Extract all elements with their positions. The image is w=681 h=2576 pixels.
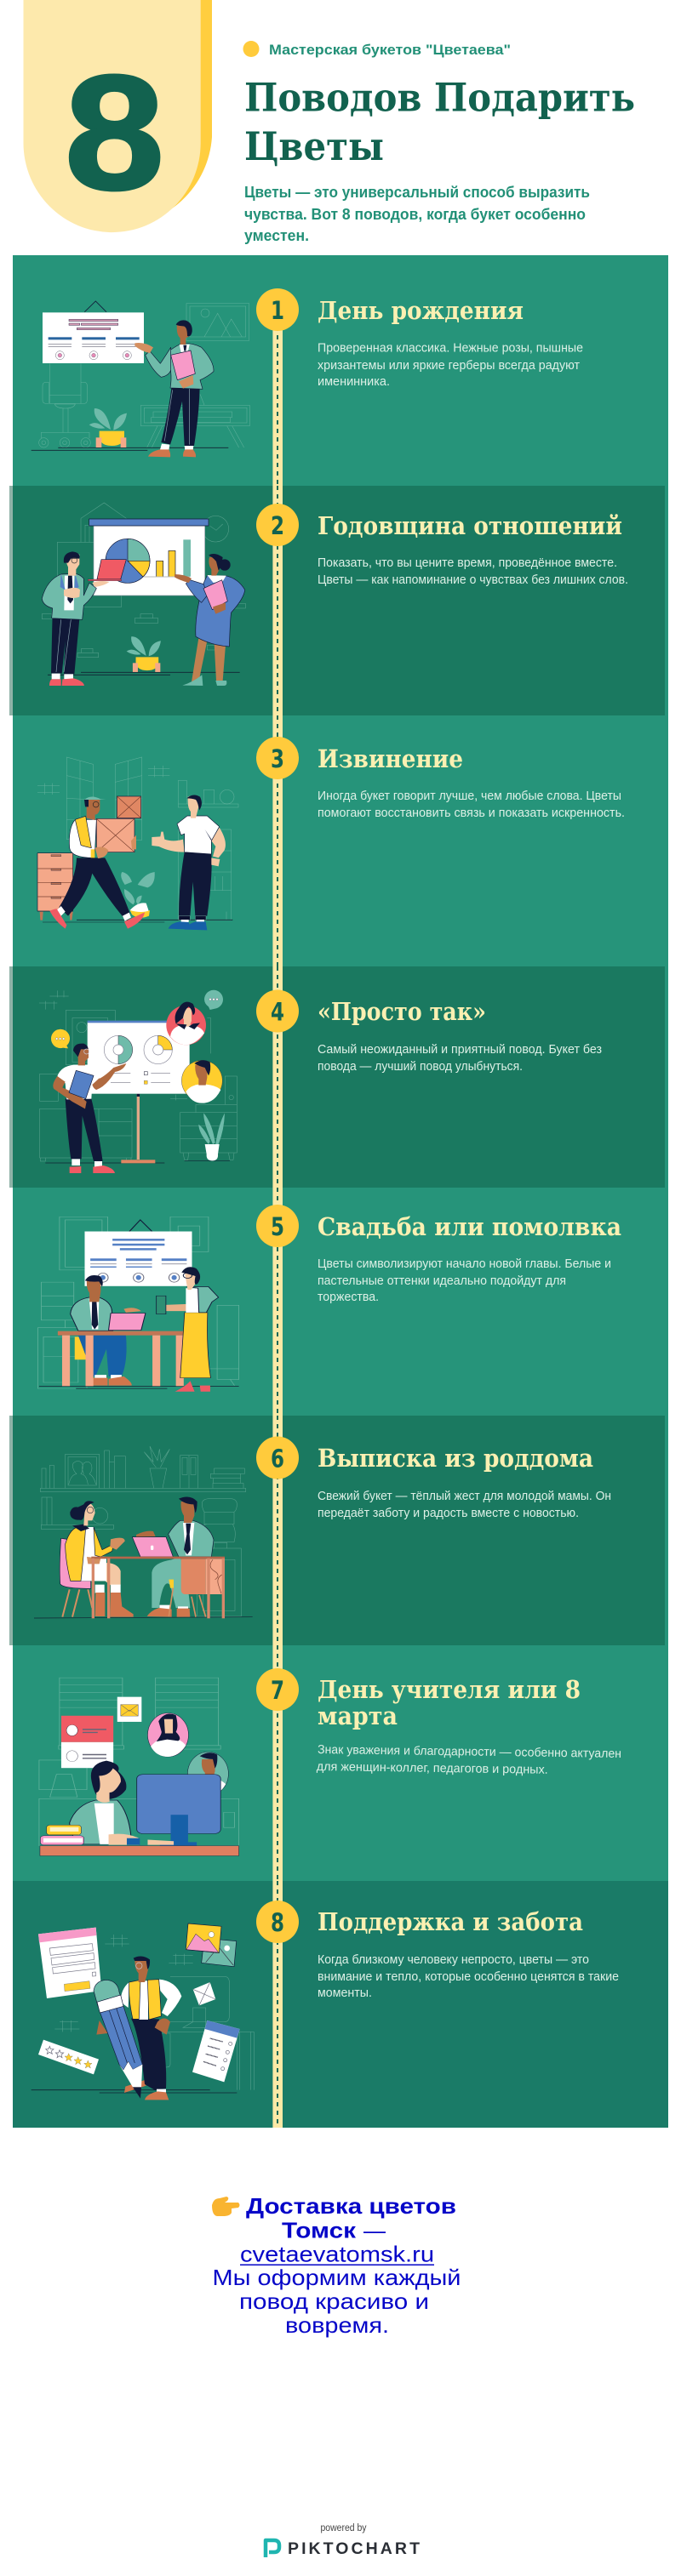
number circle 6	[256, 1436, 299, 1479]
panel: step 5	[37, 1188, 621, 1416]
website link: cvetaevatomsk.ru	[240, 2241, 434, 2266]
presentation board	[88, 1021, 190, 1163]
number circle 3: 3	[271, 744, 284, 773]
delivery text: Мы оформим каждый	[213, 2265, 461, 2290]
step 5 heading: Свадьба или помолвка	[318, 1212, 621, 1241]
illustration: man with giant pencil	[31, 1923, 254, 2100]
icon: pointing hand	[212, 2197, 240, 2216]
intro text: Цветы — это универсальный способ выразить	[244, 184, 590, 201]
step 1 description	[318, 342, 583, 389]
plant	[127, 636, 161, 672]
illustration: meeting at desk	[37, 1217, 239, 1392]
step 7 heading	[318, 1675, 581, 1730]
plant	[121, 872, 155, 918]
avatar man	[187, 1752, 228, 1796]
step 1 description: Проверенная классика. Нежные розы, пышные	[318, 342, 583, 356]
chart board	[88, 519, 209, 596]
computer	[137, 1775, 220, 1846]
panel: step 7	[39, 1645, 621, 1881]
timeline segment	[272, 1416, 283, 1645]
illustration: presenter at board	[31, 301, 249, 457]
step 1 heading: День рождения	[318, 296, 524, 325]
number circle 2	[256, 504, 299, 546]
character	[53, 1044, 126, 1173]
step 2 description: Показать, что вы цените время, проведённое вместе.	[318, 556, 617, 570]
footer branding	[266, 2523, 420, 2558]
panel: step 8	[13, 1881, 668, 2128]
header	[24, 0, 635, 244]
number circle 5: 5	[271, 1212, 284, 1241]
step 5 description: пастельные оттенки идеально подойдут для	[318, 1274, 566, 1288]
number circle 7: 7	[271, 1676, 284, 1705]
timeline segment	[272, 966, 283, 1188]
step 7 heading: День учителя или 8	[318, 1675, 581, 1704]
step 4 description: Самый неожиданный и приятный повод. Букет без	[318, 1043, 602, 1057]
delivery text: вовремя.	[285, 2312, 389, 2338]
number circle 1: 1	[271, 296, 284, 325]
illustration: two people at table	[34, 1446, 253, 1618]
panel: step 4	[9, 966, 665, 1188]
delivery heading: —	[363, 2217, 386, 2243]
timeline segment	[272, 715, 283, 966]
avatar woman	[147, 1713, 188, 1757]
step 8 heading: Поддержка и забота	[318, 1907, 583, 1936]
number circle 6: 6	[271, 1445, 284, 1473]
step 8 description: моменты.	[318, 1986, 372, 2000]
step 5 description: Цветы символизируют начало новой главы. Белые и	[318, 1257, 611, 1271]
man	[42, 551, 109, 686]
step 3 description	[318, 789, 625, 820]
step 6 description: передаёт заботу и радость вместе с новостью.	[318, 1507, 579, 1520]
step 8 description: Когда близкому человеку непросто, цветы — это	[318, 1953, 589, 1967]
cards	[61, 1697, 141, 1768]
delivery heading: Томск	[282, 2217, 357, 2243]
timeline segment	[272, 1645, 283, 1881]
panel: step 1	[31, 288, 583, 486]
number badge: 8: 8	[65, 41, 164, 224]
avatar man	[181, 1060, 222, 1103]
intro text: чувства. Вот 8 поводов, когда букет особенно	[244, 206, 586, 223]
number circle 5	[256, 1205, 299, 1247]
step 7 description: Знак уважения и благодарности — особенно актуален	[318, 1743, 621, 1761]
potted plant	[198, 1113, 225, 1160]
man with box	[49, 796, 145, 929]
woman thumbs up	[152, 795, 226, 930]
man at desk	[71, 1275, 146, 1386]
desk	[40, 1846, 239, 1855]
illustration: online teacher	[39, 1678, 239, 1855]
panel background	[13, 1881, 668, 2128]
number circle 8	[256, 1901, 299, 1943]
step 2 description: Цветы — как напоминание о чувствах без лишних слов.	[318, 573, 628, 587]
delivery heading: Доставка цветов	[246, 2193, 456, 2219]
step 1 description: хризантемы или яркие герберы всегда радуют	[318, 359, 580, 373]
plant	[89, 408, 127, 447]
step 3 description: Иногда букет говорит лучше, чем любые слова. Цветы	[318, 789, 621, 803]
woman in chair	[60, 1501, 134, 1617]
step 8 description	[318, 1953, 619, 2000]
timeline segment	[272, 1188, 283, 1416]
step 4 description: повода — лучший повод улыбнуться.	[318, 1060, 523, 1074]
panel background	[9, 486, 665, 715]
step 3 heading: Извинение	[318, 744, 463, 773]
books	[40, 1825, 83, 1845]
character	[134, 320, 214, 457]
board	[84, 1220, 192, 1286]
woman with cup	[157, 1267, 219, 1392]
pencil	[94, 1980, 142, 2099]
step 7 heading: марта	[318, 1701, 398, 1730]
intro text	[244, 184, 590, 244]
form card	[38, 1928, 101, 1998]
panel backdrop	[13, 255, 668, 2128]
timeline segment	[272, 310, 283, 486]
step 4 description	[318, 1043, 602, 1074]
step 6 description	[318, 1490, 611, 1520]
panel: step 3	[37, 715, 625, 966]
man at table	[132, 1496, 214, 1617]
number circle 4	[256, 990, 299, 1033]
checklist card	[192, 2020, 240, 2082]
teacher	[70, 1761, 174, 1845]
step 2 description	[318, 556, 628, 587]
number circle 8: 8	[271, 1908, 284, 1937]
panel background	[9, 966, 665, 1188]
picture cards	[186, 1923, 237, 1967]
number circle 4: 4	[271, 997, 284, 1026]
desk	[58, 1331, 184, 1386]
intro text: уместен.	[244, 227, 309, 244]
timeline segment	[272, 1881, 283, 2128]
step 2 heading: Годовщина отношений	[318, 511, 622, 540]
call to action	[212, 2193, 461, 2338]
panel: step 2	[9, 486, 665, 715]
title: Поводов Подарить	[244, 75, 635, 121]
icon: piktochart logo	[266, 2540, 279, 2557]
envelope	[193, 1982, 215, 2005]
number circle 2: 2	[271, 511, 284, 540]
number circle 7	[256, 1668, 299, 1711]
step 8 description: внимание и тепло, которые особенно ценятся в такие	[318, 1970, 619, 1984]
dresser	[37, 853, 73, 920]
step 3 description: помогают восстановить связь и показать искренность.	[318, 806, 625, 820]
character	[96, 1957, 181, 2100]
step 5 description: торжества.	[318, 1291, 379, 1304]
timeline segment	[272, 486, 283, 715]
panel: step 6	[9, 1416, 665, 1645]
step 7 description	[317, 1743, 621, 1778]
step 7 description: для женщин-коллег, педагогов и родных.	[317, 1760, 548, 1777]
piktochart wordmark: PIKTOCHART	[288, 2539, 420, 2558]
panel background	[9, 1416, 665, 1645]
board	[43, 312, 144, 363]
table	[91, 1557, 225, 1618]
illustration: delivering a box	[37, 757, 238, 930]
speech bubbles	[51, 990, 223, 1048]
step 6 heading: Выписка из роддома	[318, 1444, 593, 1473]
step 5 description	[318, 1257, 611, 1304]
step 1 description: именинника.	[318, 375, 390, 389]
number circle 3	[256, 737, 299, 779]
number badge: 8	[24, 0, 212, 232]
title	[244, 75, 635, 169]
rating card	[38, 2040, 99, 2074]
brand line: Мастерская букетов "Цветаева"	[269, 42, 511, 58]
illustration: video call presentation	[39, 990, 237, 1173]
powered by label: powered by	[320, 2523, 367, 2533]
number circle 1	[256, 288, 299, 331]
title: Цветы	[244, 123, 384, 169]
delivery heading	[246, 2193, 456, 2243]
illustration: two people and chart	[42, 503, 245, 686]
avatar woman	[166, 1002, 206, 1045]
delivery text	[213, 2265, 461, 2338]
woman	[175, 554, 245, 686]
delivery text: повод красиво и	[239, 2288, 429, 2314]
step 4 heading: «Просто так»	[318, 997, 486, 1026]
step 6 description: Свежий букет — тёплый жест для молодой мамы. Он	[318, 1490, 611, 1503]
